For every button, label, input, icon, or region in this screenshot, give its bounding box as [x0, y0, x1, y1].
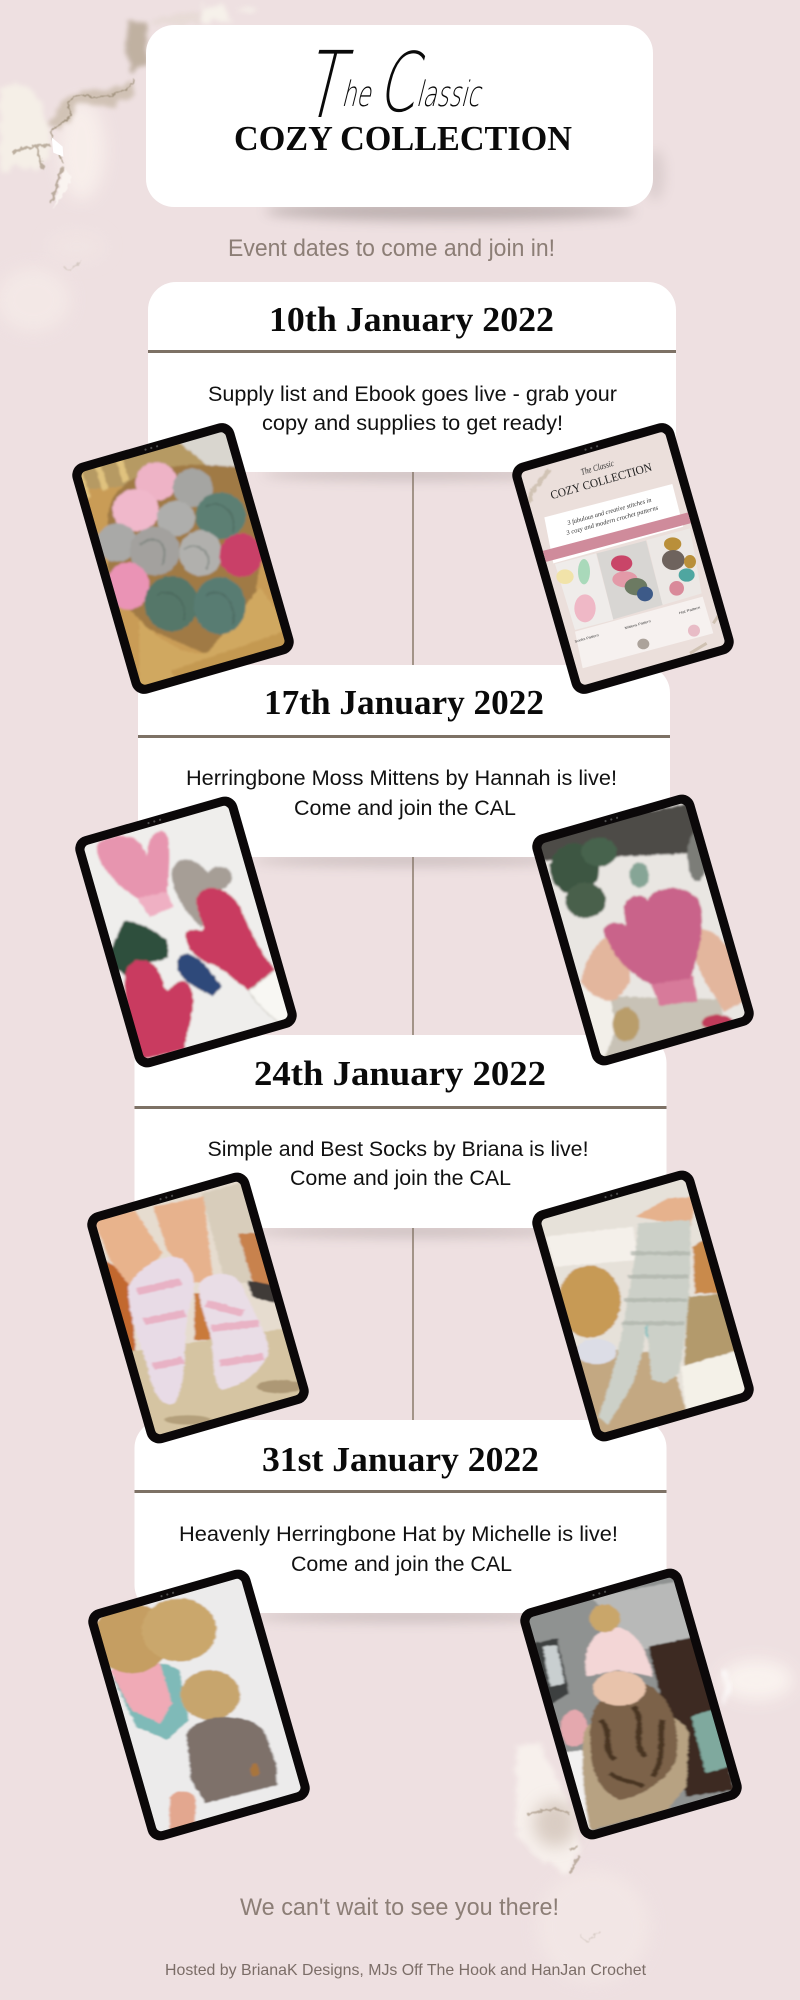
panel: 24th January	[134, 1035, 666, 1237]
tablet: yarn photo	[72, 423, 294, 694]
panel: 17th January	[138, 665, 670, 866]
watercolor: top left	[0, 3, 257, 332]
ebook intro line one: 3 fabulous and creative stitches in	[566, 497, 652, 527]
ebook hat label: Hat Pattern	[678, 605, 701, 615]
ebook mittens label: Mittens Pattern	[624, 619, 651, 630]
ebook socks label: Socks Pattern	[574, 633, 599, 644]
ebook heading: COZY COLLECTION	[549, 460, 654, 502]
vertical timeline connector	[412, 472, 414, 1420]
description: copy and supplies to get ready!	[262, 412, 563, 435]
script heading: he	[339, 75, 378, 115]
tablet: knee-high socks	[532, 1170, 754, 1442]
script heading: T	[296, 31, 360, 139]
tablet: ankle socks	[87, 1172, 309, 1444]
description: Come and join the CAL	[294, 797, 516, 820]
panel: title card	[146, 25, 665, 221]
description: Heavenly Herringbone Hat by Michelle is live!	[179, 1523, 618, 1546]
date heading: 17th January 2022	[264, 683, 544, 722]
heading: cozy collection: COZY COLLECTION	[234, 119, 572, 158]
tablet: ebook cover preview	[512, 423, 734, 694]
description: Herringbone Moss Mittens by Hannah is live!	[186, 767, 617, 790]
script heading: lassic	[413, 75, 487, 115]
tablet: mitten held in hands	[532, 794, 754, 1066]
date heading: 31st January 2022	[262, 1440, 539, 1479]
ebook intro line two: 3 cozy and modern crochet patterns	[565, 505, 659, 537]
description: Come and join the CAL	[291, 1553, 512, 1576]
date heading: 24th January 2022	[254, 1054, 546, 1093]
script heading: C	[372, 35, 433, 131]
tablet: woman in pink hat	[520, 1568, 742, 1840]
tablet: mittens flat lay	[75, 796, 297, 1068]
tablet: pompom hats	[88, 1570, 310, 1840]
panel: 31st January	[134, 1420, 666, 1622]
ebook script title: The Classic	[579, 458, 615, 477]
watercolor: bottom right	[515, 1660, 793, 1983]
description: Supply list and Ebook goes live - grab your	[208, 383, 617, 406]
description: Simple and Best Socks by Briana is live!	[208, 1138, 588, 1161]
panel: 10th January	[148, 282, 676, 480]
date heading: 10th January 2022	[269, 300, 554, 339]
description: Come and join the CAL	[290, 1167, 511, 1190]
closing message: We can't wait to see you there!	[240, 1894, 559, 1921]
hosts credit: Hosted by BrianaK Designs, MJs Off The Hook and HanJan Crochet	[165, 1962, 647, 1979]
subheading: Event dates to come and join in!	[228, 235, 555, 262]
